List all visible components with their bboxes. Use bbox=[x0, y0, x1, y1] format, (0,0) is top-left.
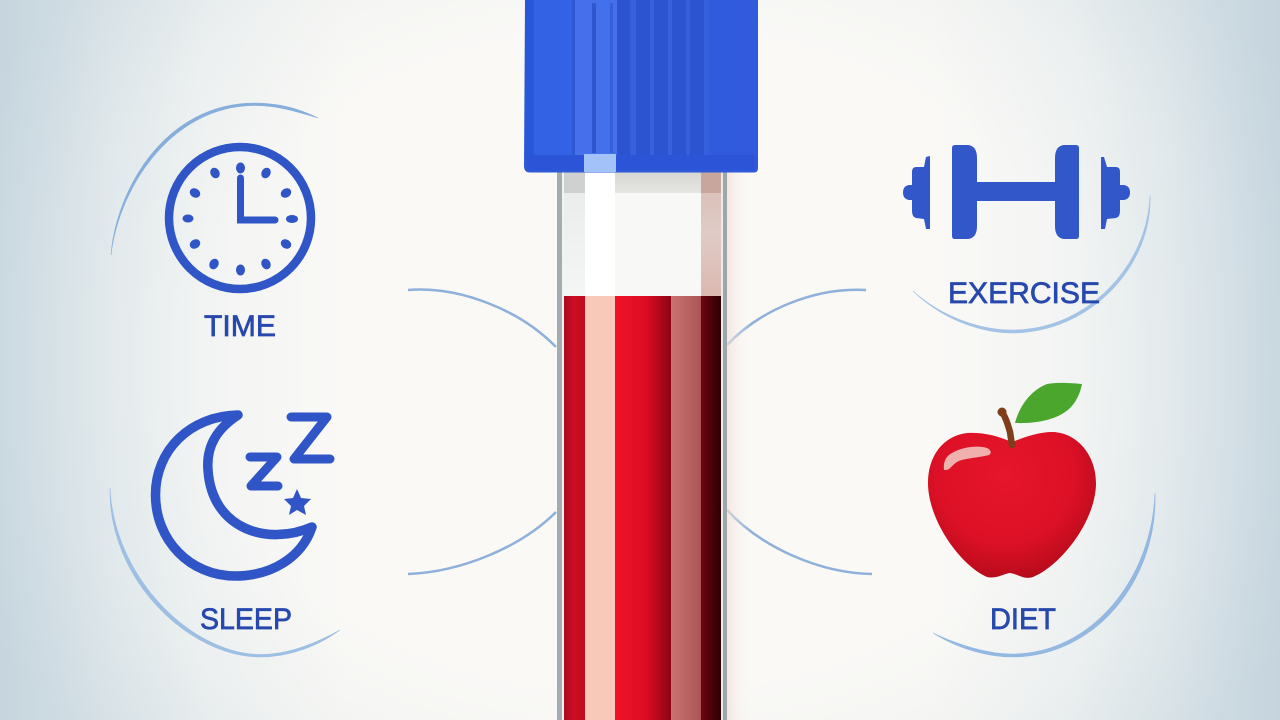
connector: lower left bbox=[408, 512, 556, 574]
icon: apple bbox=[928, 383, 1096, 578]
label: time: TIME bbox=[204, 310, 276, 343]
arc: time ring bbox=[111, 103, 318, 255]
connector: lower right bbox=[727, 510, 872, 574]
icon: clock bbox=[169, 147, 311, 289]
diet group bbox=[928, 383, 1096, 636]
arc: exercise ring bbox=[913, 195, 1150, 333]
icon: dumbbell bbox=[903, 145, 1130, 239]
arc: sleep ring bbox=[110, 488, 340, 657]
white serum layer bbox=[563, 172, 721, 296]
arc: diet ring bbox=[933, 493, 1155, 657]
red blood layer bbox=[563, 296, 721, 720]
blood test tube bbox=[557, 172, 727, 720]
tube shadow bbox=[727, 172, 751, 720]
label: sleep: SLEEP bbox=[200, 603, 292, 636]
glass walls bbox=[557, 172, 727, 720]
sleep group bbox=[156, 415, 330, 636]
connector: upper left bbox=[408, 290, 556, 347]
time group bbox=[169, 147, 311, 343]
icon: moon with z's and star bbox=[156, 415, 330, 576]
blue tube cap bbox=[524, 0, 758, 172]
exercise group bbox=[903, 145, 1130, 310]
label: exercise: EXERCISE bbox=[948, 277, 1100, 310]
connector: upper right bbox=[727, 290, 866, 345]
label: diet: DIET bbox=[990, 603, 1056, 636]
cap highlight notch bbox=[584, 154, 616, 172]
